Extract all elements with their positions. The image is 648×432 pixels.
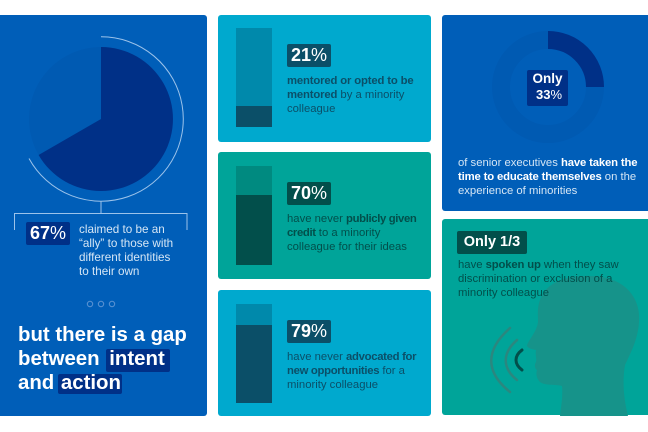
text: executives: of senior executives have taken the [458,157,637,169]
text: mentored [287,75,414,115]
text: credit: credit to a minority [287,227,380,239]
text: claimed ally: different identities [79,251,170,264]
text: spoken up [458,259,619,299]
text: executives [458,157,638,197]
text: claimed ally: “ally” to those with [79,237,173,250]
text: mentored: colleague [287,103,335,115]
text: executives: time to educate themselves on the [458,171,636,183]
stat badge: only 1/3 [457,231,527,254]
text: spoken up: minority colleague [458,287,549,299]
stat badge: only 1/3: Only 1/3 [464,234,520,250]
panel: advocated [218,290,431,416]
bar: 21 percent [236,28,272,127]
stat badge: only 33%: Only [532,71,562,86]
text: claimed ally: to their own [79,265,139,278]
heading: gap between intent and action: but there is a gap [18,324,187,346]
stat badge: 67%: 67% [30,223,66,243]
text: claimed ally: claimed to be an [79,223,165,236]
donut chart: 33 percent [548,31,604,87]
stat badge: only 33%: 33% [536,87,562,102]
text: credit: have never publicly given [287,213,416,225]
panel: mentored [218,15,431,142]
text: advocated: minority colleague [287,379,378,391]
text: advocated: new opportunities for a [287,365,405,377]
panel: allies [0,15,207,416]
stat badge: 79%: 79% [291,321,327,341]
text: advocated: have never advocated for [287,351,416,363]
heading: gap between intent and action: between intent [18,348,165,370]
text: spoken up: discrimination or exclusion of a [458,273,612,285]
text: credit [287,213,416,253]
text: executives: experience of minorities [458,185,577,197]
heading: gap between intent and action: and action [18,372,121,394]
decorative dots [86,300,116,308]
panel: spoken up [442,219,648,415]
pie chart: 67 percent [14,36,188,230]
stat badge: 21%: 21% [291,45,327,65]
bar: 79 percent [236,304,272,403]
stat badge: only 33% [527,70,568,106]
text: advocated [287,351,416,391]
icon: speaking head [490,276,639,416]
panel: executives [442,15,648,211]
text: credit: colleague for their ideas [287,241,407,253]
stat badge: 70%: 70% [291,183,327,203]
text: mentored: mentored or opted to be [287,75,413,87]
bar: 70 percent [236,166,272,265]
text: spoken up: have spoken up when they saw [458,259,619,271]
text: claimed ally [79,223,173,278]
panel: credit [218,152,431,279]
heading: gap between intent and action [18,324,187,394]
text: mentored: mentored by a minority [287,89,404,101]
